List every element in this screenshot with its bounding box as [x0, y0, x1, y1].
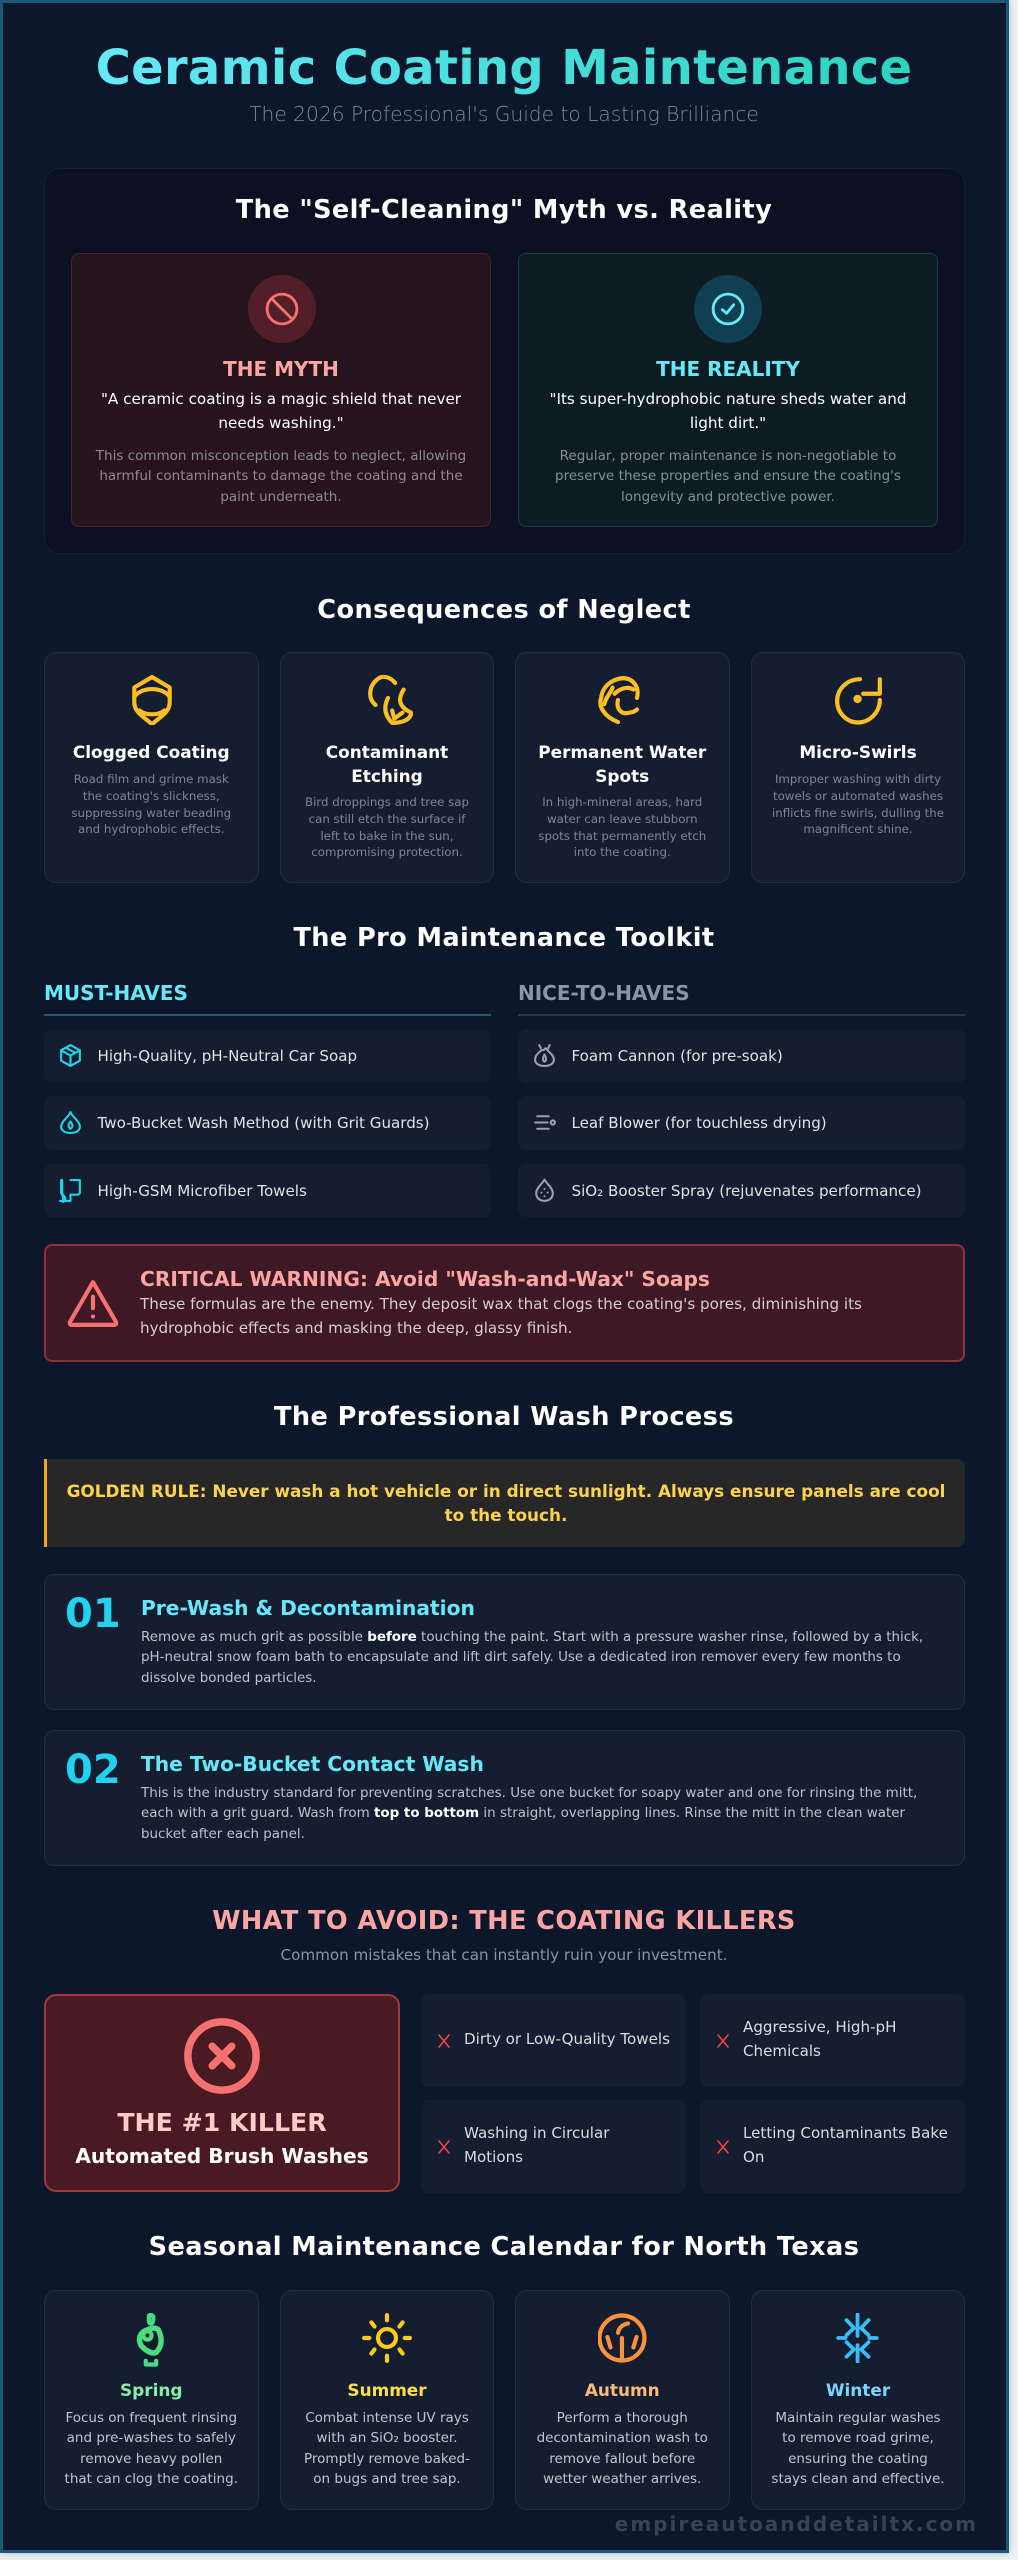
- myth explanation: harmful contaminants to damage the coating and the: [99, 468, 463, 484]
- icon: x: [438, 2140, 450, 2154]
- title: Permanent Water: [538, 742, 706, 762]
- heading: wash process: The Professional Wash Process: [274, 1402, 734, 1432]
- card: water spots: [515, 652, 730, 883]
- text: Motions: [464, 2148, 523, 2166]
- step text: pH-neutral snow foam bath to encapsulate and lift dirt safely. Use a dedicated iron remover every few months to: [141, 1650, 901, 1665]
- text: Dirty or Low-Quality Towels: [464, 2030, 670, 2048]
- text: On: [743, 2148, 764, 2166]
- item: circular motions: [421, 2100, 686, 2193]
- season text: to remove road grime,: [782, 2430, 934, 2446]
- season text: [64, 2410, 238, 2487]
- icon: spring sprout: [136, 2313, 164, 2367]
- step text: each with a grit guard. Wash from top to bottom in straight, overlapping lines. Rinse the mitt in the clean water: [141, 1806, 905, 1821]
- description: [71, 772, 231, 836]
- icon: drop with dots: [535, 1178, 554, 1202]
- description: the coating's slickness,: [83, 789, 220, 803]
- description: and hydrophobic effects.: [78, 822, 225, 836]
- heading: toolkit: The Pro Maintenance Toolkit: [293, 923, 715, 953]
- heading: what to avoid: WHAT TO AVOID: THE COATING KILLERS: [212, 1906, 796, 1936]
- item: contaminants bake: [700, 2100, 965, 2193]
- reality explanation: longevity and protective power.: [621, 489, 835, 505]
- season text: stays clean and effective.: [771, 2471, 945, 2487]
- season text: remove heavy pollen: [80, 2451, 222, 2467]
- step text: bucket after each panel.: [141, 1827, 305, 1842]
- icon: drop: [60, 1111, 81, 1134]
- description: water can leave stubborn: [547, 812, 698, 826]
- text: Chemicals: [743, 2042, 821, 2060]
- description: towels or automated washes: [773, 789, 943, 803]
- item: microfiber towels: [44, 1164, 491, 1217]
- heading: consequences: Consequences of Neglect: [317, 595, 691, 625]
- title: Ceramic Coating Maintenance: [96, 40, 912, 96]
- step title: Pre-Wash & Decontamination: [141, 1596, 475, 1620]
- myth explanation: [96, 448, 466, 505]
- text: Two-Bucket Wash Method (with Grit Guards): [98, 1114, 430, 1132]
- description: In high-mineral areas, hard: [542, 795, 702, 809]
- myth explanation: This common misconception leads to neglect, allowing: [96, 448, 466, 464]
- step text: dissolve bonded particles.: [141, 1671, 317, 1686]
- season text: [304, 2410, 470, 2487]
- item: chemicals: [700, 1994, 965, 2087]
- text: Foam Cannon (for pre-soak): [572, 1047, 783, 1065]
- text: SiO₂ Booster Spray (rejuvenates performance): [572, 1182, 922, 1200]
- icon: x: [717, 2034, 729, 2048]
- season text: wetter weather arrives.: [543, 2471, 701, 2487]
- icon: water swirl: [598, 676, 640, 724]
- heading: must-haves: MUST-HAVES: [44, 981, 188, 1005]
- icon: autumn leaf circle: [598, 2313, 647, 2363]
- callout: golden rule: [44, 1459, 965, 1547]
- panel: the myth: [71, 253, 491, 527]
- step title: The Two-Bucket Contact Wash: [141, 1752, 484, 1776]
- description: spots that permanently etch: [538, 829, 706, 843]
- season text: Perform a thorough: [557, 2410, 688, 2426]
- icon: prohibited: [248, 275, 316, 343]
- title: Micro-Swirls: [799, 742, 917, 762]
- panel: myth vs reality: [44, 168, 965, 554]
- text: Leaf Blower (for touchless drying): [572, 1114, 827, 1132]
- text: [464, 2124, 610, 2166]
- myth quote: "A ceramic coating is a magic shield that never: [101, 390, 461, 408]
- killer name: Automated Brush Washes: [75, 2144, 369, 2168]
- golden rule text: to the touch.: [445, 1505, 567, 1525]
- description: can still etch the surface if: [309, 812, 465, 826]
- season text: on bugs and tree sap.: [313, 2471, 461, 2487]
- heading: nice-to-haves: NICE-TO-HAVES: [518, 981, 690, 1005]
- season text: that can clog the coating.: [65, 2471, 238, 2487]
- season text: and pre-washes to safely: [67, 2430, 236, 2446]
- season text: with an SiO₂ booster.: [316, 2430, 458, 2446]
- season name: Autumn: [585, 2380, 660, 2400]
- step number: 01: [65, 1591, 121, 1637]
- icon: blower lines: [534, 1115, 556, 1130]
- season text: [537, 2410, 708, 2487]
- season text: [752, 2408, 964, 2489]
- description: [772, 772, 944, 836]
- item: leaf blower: [518, 1096, 965, 1150]
- icon: foam: [534, 1044, 555, 1067]
- warning text: hydrophobic effects and masking the deep, glassy finish.: [140, 1319, 572, 1337]
- season text: Maintain regular washes: [775, 2410, 941, 2426]
- subheading: what to avoid: Common mistakes that can instantly ruin your investment.: [281, 1946, 727, 1964]
- season text: remove fallout before: [549, 2451, 695, 2467]
- reality quote: light dirt.": [690, 414, 766, 432]
- step 02: [44, 1730, 965, 1866]
- icon: shield: [132, 675, 172, 725]
- item: booster spray: [518, 1164, 965, 1217]
- subtitle: The 2026 Professional's Guide to Lasting Brilliance: [249, 102, 759, 126]
- card: spring: [44, 2290, 258, 2510]
- text: Washing in Circular: [464, 2124, 609, 2142]
- season name: Spring: [120, 2380, 182, 2400]
- season text: Promptly remove baked-: [304, 2451, 470, 2467]
- season name: Winter: [826, 2380, 890, 2400]
- description: [538, 795, 706, 859]
- card: clogged coating: [44, 652, 258, 883]
- season name: Summer: [347, 2380, 427, 2400]
- myth explanation: paint underneath.: [220, 489, 342, 505]
- heading: seasonal calendar: Seasonal Maintenance Calendar for North Texas: [149, 2232, 859, 2262]
- icon: towel: [59, 1179, 81, 1203]
- description: compromising protection.: [311, 845, 463, 859]
- title: [326, 742, 448, 786]
- heading: myth vs reality: The "Self-Cleaning" Myth vs. Reality: [236, 195, 772, 225]
- step text: This is the industry standard for preventing scratches. Use one bucket for soapy water and one for rinsing the mitt,: [141, 1786, 917, 1801]
- step number: 02: [65, 1747, 121, 1793]
- icon: warning triangle: [68, 1280, 118, 1327]
- icon: etching: [368, 675, 413, 725]
- warning title: CRITICAL WARNING: Avoid "Wash-and-Wax" Soaps: [140, 1267, 710, 1291]
- season text: decontamination wash to: [537, 2430, 708, 2446]
- golden rule text: GOLDEN RULE: Never wash a hot vehicle or in direct sunlight. Always ensure panels are cool: [67, 1481, 945, 1501]
- title: Contaminant: [326, 742, 448, 762]
- callout: critical warning: [44, 1244, 965, 1362]
- title: Clogged Coating: [73, 742, 230, 762]
- step text: [141, 1630, 923, 1686]
- step text: [140, 1786, 917, 1842]
- icon: x circle: [184, 2018, 260, 2094]
- step 01: [44, 1574, 965, 1710]
- panel: the reality: [518, 253, 938, 527]
- text: [743, 2124, 948, 2166]
- description: Road film and grime mask: [74, 772, 229, 786]
- watermark: empireautoanddetailtx.com: [615, 2512, 978, 2536]
- item: two-bucket: [44, 1096, 491, 1150]
- title: [538, 742, 706, 786]
- icon: snowflake: [834, 2313, 884, 2363]
- description: magnificent shine.: [803, 822, 913, 836]
- card: contaminant etching: [280, 652, 494, 883]
- killer label: THE #1 KILLER: [117, 2108, 327, 2137]
- text: High-Quality, pH-Neutral Car Soap: [98, 1047, 357, 1065]
- reality quote: [549, 390, 907, 432]
- card: autumn: [515, 2290, 730, 2510]
- icon: box: [60, 1044, 81, 1067]
- title: Etching: [351, 766, 423, 786]
- season text: Focus on frequent rinsing: [65, 2410, 237, 2426]
- item: foam cannon: [518, 1029, 965, 1083]
- warning text: These formulas are the enemy. They deposit wax that clogs the coating's pores, diminishing its: [140, 1295, 862, 1313]
- text: High-GSM Microfiber Towels: [98, 1182, 307, 1200]
- season text: Combat intense UV rays: [305, 2410, 469, 2426]
- panel: number one killer: [44, 1994, 400, 2192]
- myth quote: needs washing.": [218, 414, 344, 432]
- description: into the coating.: [574, 845, 671, 859]
- description: suppressing water beading: [71, 806, 231, 820]
- icon: x: [438, 2034, 450, 2048]
- myth quote: [101, 390, 461, 432]
- description: Improper washing with dirty: [775, 772, 941, 786]
- reality quote: "Its super-hydrophobic nature sheds water and: [549, 390, 907, 408]
- title: Spots: [595, 766, 649, 786]
- season text: ensuring the coating: [788, 2451, 928, 2467]
- card: summer: [280, 2290, 494, 2510]
- icon: check circle: [694, 275, 762, 343]
- description: Bird droppings and tree sap: [305, 795, 469, 809]
- reality explanation: preserve these properties and ensure the coating's: [555, 468, 901, 484]
- icon: sun: [362, 2313, 412, 2363]
- description: inflicts fine swirls, dulling the: [772, 806, 944, 820]
- item: dirty towels: [421, 1994, 686, 2087]
- text: [743, 2018, 896, 2060]
- myth label: THE MYTH: [223, 357, 339, 381]
- description: [305, 795, 469, 859]
- text: Letting Contaminants Bake: [743, 2124, 948, 2142]
- card: micro-swirls: [751, 652, 965, 883]
- text: Aggressive, High-pH: [743, 2018, 896, 2036]
- card: winter: [751, 2290, 965, 2510]
- golden rule text: [67, 1481, 945, 1525]
- warning text: [140, 1295, 862, 1337]
- step text: Remove as much grit as possible before touching the paint. Start with a pressure washer rinse, followed by a thick,: [141, 1630, 923, 1645]
- reality label: THE REALITY: [656, 357, 800, 381]
- description: left to bake in the sun,: [320, 829, 454, 843]
- reality explanation: [555, 448, 901, 505]
- icon: x: [717, 2140, 729, 2154]
- reality explanation: Regular, proper maintenance is non-negotiable to: [560, 448, 896, 464]
- icon: swirl target: [835, 677, 882, 725]
- item: car soap: [44, 1029, 491, 1083]
